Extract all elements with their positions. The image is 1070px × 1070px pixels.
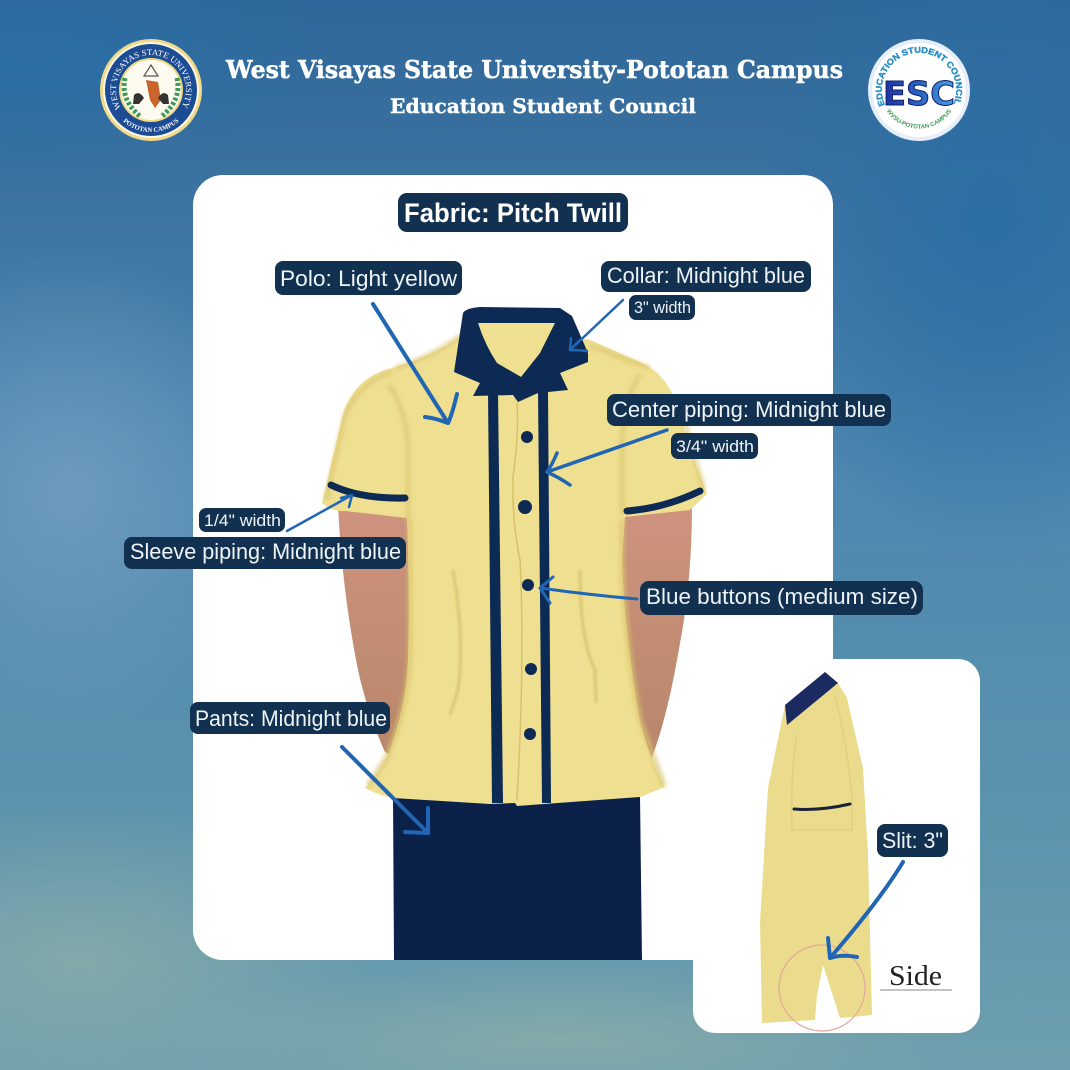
label: collar width: 3" width: [634, 298, 691, 317]
sleeve piping: [331, 485, 700, 511]
label: center piping width: [671, 433, 758, 459]
arrow: pants: [342, 747, 428, 833]
shirt shading: [326, 335, 704, 786]
arms: [338, 505, 692, 770]
arrow: center piping: [547, 430, 667, 485]
logo: West Visayas State University seal: WEST VISAYAS STATE UNIVERSITY: [110, 49, 192, 110]
logo: Education Student Council: ESC: [883, 74, 955, 113]
council name: Education Student Council: [390, 94, 696, 118]
side collar: [785, 672, 838, 725]
polo shirt body: [322, 330, 707, 806]
logo: West Visayas State University seal: POTOTAN CAMPUS: [123, 118, 178, 132]
collar: [454, 307, 588, 402]
neck opening: [478, 323, 555, 377]
arrow: sleeve piping: [287, 495, 352, 531]
panel: side view card: [693, 659, 980, 1033]
label: collar: Collar: Midnight blue: [607, 263, 805, 288]
label: collar width: [629, 295, 695, 320]
arrow: polo: [373, 304, 457, 423]
logo: West Visayas State University seal: [100, 39, 202, 141]
logo: Education Student Council: WVSU-POTOTAN CAMPUS: [887, 108, 951, 129]
label: slit: [877, 824, 948, 857]
illustration: uniform front view: [322, 307, 707, 960]
pants: [393, 795, 642, 960]
center piping: [488, 392, 551, 803]
arrow: collar: [570, 300, 623, 351]
label: center piping width: 3/4" width: [676, 437, 754, 456]
heading: fabric: Fabric: Pitch Twill: [404, 198, 622, 228]
buttons: [518, 431, 537, 740]
label: polo: Polo: Light yellow: [280, 266, 457, 291]
side seams: [792, 695, 852, 950]
arrow: slit: [828, 862, 903, 958]
label: sleeve piping: Sleeve piping: Midnight blue: [130, 539, 401, 564]
logo: Education Student Council: EDUCATION STUDENT COUNCIL: [876, 46, 962, 107]
shirt fold lines: [450, 570, 596, 715]
illustration: uniform side view: [760, 672, 952, 1031]
side polo: [760, 672, 872, 1023]
label: center piping: Center piping: Midnight blue: [612, 397, 886, 422]
label: buttons: [640, 581, 923, 615]
side caption: Side: [889, 960, 942, 992]
panel: main white card: [193, 175, 833, 960]
label: polo: [275, 261, 462, 295]
label: sleeve piping width: 1/4" width: [204, 511, 281, 530]
header title: [225, 55, 843, 118]
label: pants: Pants: Midnight blue: [195, 706, 387, 731]
arrow: buttons: [540, 577, 637, 603]
side sleeve piping: [794, 804, 850, 809]
label: buttons: Blue buttons (medium size): [646, 584, 918, 609]
logo: Education Student Council: [868, 39, 970, 141]
slit circle: [779, 945, 865, 1031]
placket line: [513, 403, 522, 800]
label: sleeve piping width: [199, 508, 285, 532]
university name: West Visayas State University-Pototan Campus: [225, 55, 843, 84]
label: slit: Slit: 3": [882, 828, 943, 853]
